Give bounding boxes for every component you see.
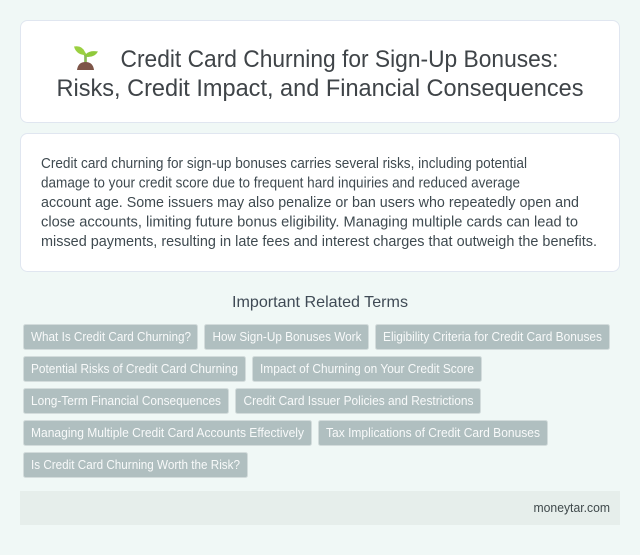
title: Risks, Credit Impact, and Financial Consequences: [56, 75, 584, 102]
title: Credit Card Churning for Sign-Up Bonuses:: [120, 46, 558, 73]
tag: [204, 324, 368, 350]
tag: [24, 324, 198, 350]
text block: summary: account age. Some issuers may also penalize or ban users who repeatedly open and: [41, 195, 579, 211]
tag: Potential Risks of Credit Card Churning: [31, 361, 238, 376]
footer source: moneytar.com: [534, 501, 610, 515]
panel: summary text: [20, 134, 620, 272]
tag: [236, 388, 480, 414]
panel: title card: [20, 20, 620, 122]
tag: [24, 420, 312, 446]
tag: [376, 324, 610, 350]
tag: [252, 356, 482, 382]
heading: important related terms: Important Related Terms: [232, 294, 408, 311]
tag list: [24, 324, 610, 478]
icon: sprout: [74, 46, 98, 70]
tag: [318, 420, 548, 446]
text block: summary: damage to your credit score due to frequent hard inquiries and reduced average: [41, 176, 520, 192]
text block: summary: close accounts, limiting future bonus eligibility. Managing multiple cards can lead to: [41, 214, 578, 230]
footer: [20, 491, 620, 525]
tag: Credit Card Issuer Policies and Restrictions: [244, 393, 474, 408]
tag: Long-Term Financial Consequences: [31, 393, 221, 408]
tag: Impact of Churning on Your Credit Score: [260, 361, 474, 376]
tag: What Is Credit Card Churning?: [31, 329, 191, 344]
text block: summary: missed payments, resulting in late fees and interest charges that outweigh the benefits.: [41, 234, 597, 250]
tag: [24, 452, 248, 478]
tag: Tax Implications of Credit Card Bonuses: [326, 425, 540, 440]
tag: Managing Multiple Credit Card Accounts Effectively: [31, 425, 305, 440]
tag: [24, 356, 246, 382]
tag: How Sign-Up Bonuses Work: [212, 329, 362, 344]
tag: Eligibility Criteria for Credit Card Bonuses: [383, 329, 602, 344]
tag: Is Credit Card Churning Worth the Risk?: [31, 457, 240, 472]
text block: summary: Credit card churning for sign-up bonuses carries several risks, including potential: [41, 156, 527, 172]
tag: [24, 388, 228, 414]
